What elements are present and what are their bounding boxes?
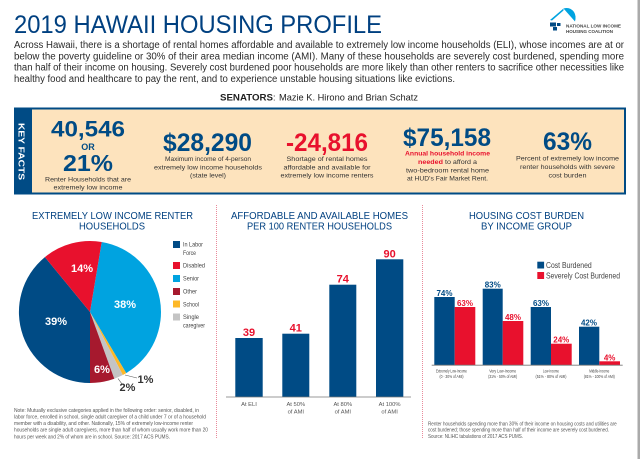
- fact: severe cost burden: [516, 128, 619, 180]
- pie chart: 6%: [94, 364, 110, 376]
- bar chart: cost burden by income group: 63%: [533, 299, 549, 308]
- pie legend: [173, 241, 206, 330]
- fact: shortage: [280, 129, 374, 180]
- fact: annual income needed: Annual household income: [405, 150, 490, 158]
- fact: maximum income: (state level): [190, 172, 226, 180]
- fact: annual income needed: [403, 124, 491, 182]
- fact: shortage: affordable and available for: [284, 164, 371, 172]
- fact: maximum income: Maximum income of 4-person: [165, 156, 251, 163]
- heading: affordable and available homes: [231, 210, 408, 232]
- fact: shortage: extremely low income renters: [280, 172, 374, 180]
- bar chart: cost burden by income group: Low-Income: [543, 368, 559, 374]
- bar chart: affordable homes: At ELI: [241, 402, 257, 408]
- senators line: :: [273, 92, 276, 102]
- fact: severe cost burden: cost burden: [548, 172, 587, 180]
- note: pie chart: Note: Mutually exclusive categories applied in the following order: senior, disabled, in: [14, 408, 199, 414]
- heading: extremely low income renter households: EXTREMELY LOW INCOME RENTER: [32, 210, 193, 222]
- heading: housing cost burden: HOUSING COST BURDEN: [469, 210, 584, 222]
- fact: severe cost burden: Percent of extremely low income: [516, 156, 619, 162]
- heading: housing cost burden: BY INCOME GROUP: [481, 220, 572, 232]
- pie chart: 1%: [138, 374, 154, 386]
- note: cost burden: Source: NLIHC tabulations of 2017 ACS PUMS.: [428, 434, 523, 440]
- fact: severe cost burden: 63%: [543, 128, 592, 156]
- bar chart: cost burden by income group: 83%: [485, 280, 501, 290]
- bar chart: cost burden by income group: [432, 280, 623, 379]
- bar chart: cost burden by income group: 63%: [457, 299, 473, 308]
- icon: NLIHC logo: NATIONAL LOW INCOME: [566, 24, 621, 29]
- bar chart: cost burden by income group: (81% - 100% of AMI): [584, 374, 615, 379]
- senators line: SENATORS: [220, 92, 273, 102]
- heading: affordable and available homes: AFFORDABLE AND AVAILABLE HOMES: [231, 210, 408, 222]
- bar chart: affordable homes: 74: [337, 274, 350, 286]
- fact: annual income needed: $75,158: [403, 124, 491, 152]
- fact: maximum income: extremely low income households: [154, 164, 263, 172]
- heading: housing cost burden: [469, 210, 584, 232]
- intro paragraph: Across Hawaii, there is a shortage of rental homes affordable and available to extremely low income households (ELI), whose incomes are at or: [14, 40, 625, 51]
- pie legend: Senior: [183, 276, 200, 282]
- intro paragraph: healthy food and healthcare to pay the rent, and to experience unstable housing situations like evictions.: [14, 74, 455, 85]
- fact: annual income needed: needed to afford a: [418, 159, 477, 166]
- fact: maximum income: [154, 129, 263, 180]
- bar chart: cost burden by income group: 42%: [581, 319, 597, 328]
- fact: renter households: extremely low income: [54, 184, 123, 192]
- note: pie chart: [14, 408, 208, 440]
- bar chart: cost burden by income group: (31% - 50% of AMI): [488, 374, 518, 379]
- heading: extremely low income renter households: [32, 210, 193, 232]
- note: pie chart: hours per week and 2% of whom are in school. Source: 2017 ACS PUMS.: [14, 434, 170, 440]
- bar chart: cost burden by income group: Extremely Low-Income: [436, 368, 467, 374]
- bar chart: cost burden by income group: 74%: [436, 289, 453, 298]
- pie legend: Single: [183, 314, 199, 321]
- fact: renter households: [45, 116, 131, 192]
- bar chart: affordable homes: At 80%: [333, 402, 352, 408]
- pie chart: 38%: [114, 299, 136, 311]
- fact: maximum income: $28,290: [163, 129, 252, 157]
- fact: annual income needed: two-bedroom rental home: [406, 168, 489, 174]
- bar chart: cost burden by income group: (51% - 80% of AMI): [536, 374, 567, 379]
- panel: key facts: [14, 108, 625, 194]
- legend: cost burden: Cost Burdened: [546, 261, 592, 270]
- pie chart: 39%: [45, 316, 67, 328]
- legend: cost burden: Severely Cost Burdened: [546, 272, 620, 280]
- bar chart: affordable homes: 39: [243, 327, 255, 339]
- bar chart: cost burden by income group: (0 - 30% of AMI): [440, 374, 464, 379]
- senators line: [220, 92, 419, 102]
- fact: shortage: -24,816: [286, 129, 368, 157]
- fact: renter households: OR: [81, 142, 95, 152]
- senators line: Mazie K. Hirono and Brian Schatz: [279, 92, 419, 102]
- legend: cost burden: [537, 261, 620, 280]
- pie legend: In Labor: [183, 242, 204, 248]
- icon: NLIHC logo: [550, 8, 621, 34]
- bar chart: affordable homes: 41: [290, 323, 302, 335]
- pie legend: Force: [183, 250, 196, 257]
- pie legend: School: [183, 302, 199, 308]
- fact: annual income needed: at HUD's Fair Market Rent.: [407, 176, 488, 182]
- fact: shortage: Shortage of rental homes: [286, 156, 368, 163]
- intro paragraph: than half of their income on housing. Severely cost burdened poor households are more likely than other renters to sacrifice other necessities like: [14, 62, 624, 74]
- note: cost burden: cost burdened; those spending more than half of their income are severely cost burdened.: [428, 428, 609, 434]
- fact: renter households: 40,546: [51, 116, 125, 142]
- pie chart: 14%: [71, 263, 93, 275]
- bar chart: cost burden by income group: 48%: [505, 313, 521, 322]
- pie legend: caregiver: [183, 322, 206, 330]
- bar chart: cost burden by income group: 4%: [604, 353, 615, 362]
- bar chart: cost burden by income group: 24%: [553, 336, 569, 345]
- note: cost burden: [428, 421, 617, 440]
- bar chart: affordable homes: of AMI: [335, 410, 351, 416]
- pie chart: [19, 241, 161, 394]
- fact: severe cost burden: renter households with severe: [520, 164, 615, 171]
- fact: renter households: 21%: [63, 150, 113, 176]
- pie legend: Other: [183, 288, 198, 296]
- icon: NLIHC logo: HOUSING COALITION: [566, 29, 613, 34]
- title: 2019 HAWAII HOUSING PROFILE: [14, 11, 382, 39]
- pie legend: Disabled: [183, 262, 205, 270]
- bar chart: affordable homes: of AMI: [381, 410, 398, 416]
- bar chart: affordable homes: of AMI: [288, 410, 304, 416]
- bar chart: affordable homes: [226, 248, 411, 416]
- bar chart: affordable homes: At 100%: [379, 402, 401, 408]
- note: pie chart: households are single adult caregivers, more than half of whom usually work more than 20: [14, 428, 208, 434]
- note: pie chart: member with a disability, and other. Nationally, 15% of extremely low-income renter: [14, 421, 193, 427]
- heading: extremely low income renter households: HOUSEHOLDS: [79, 220, 145, 232]
- heading: affordable and available homes: PER 100 RENTER HOUSEHOLDS: [247, 220, 392, 232]
- label: key facts: KEY FACTS: [16, 123, 26, 180]
- bar chart: affordable homes: At 50%: [286, 402, 305, 408]
- note: pie chart: labor force, enrolled in school, single adult caregiver of a child under 7 or of a household: [14, 414, 206, 420]
- pie chart: 2%: [120, 382, 136, 394]
- bar chart: cost burden by income group: Very Low-Income: [489, 368, 517, 374]
- bar chart: cost burden by income group: Middle-Income: [589, 368, 610, 374]
- intro paragraph: below the poverty guideline or 30% of their area median income (AMI). Many of these households are severely cost burdened, spending more: [14, 52, 624, 62]
- intro paragraph: [14, 40, 625, 85]
- bar chart: affordable homes: 90: [383, 248, 396, 260]
- fact: renter households: Renter Households that are: [45, 176, 131, 184]
